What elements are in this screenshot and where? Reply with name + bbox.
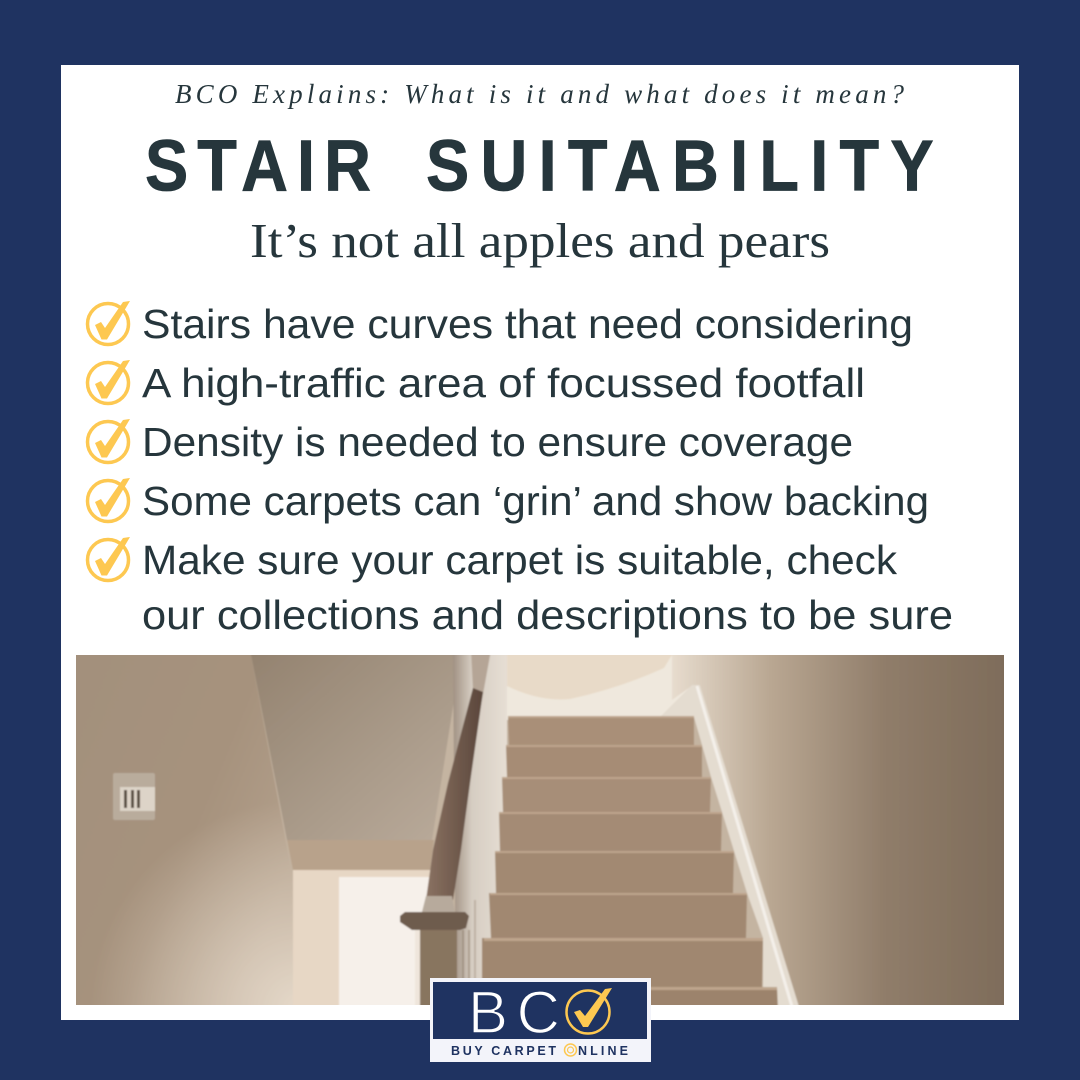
white skirting (660, 685, 800, 1010)
subtitle: It’s not all apples and pears (250, 213, 830, 268)
icon: check (88, 301, 130, 344)
item 5: Make sure your carpet is suitable, check (142, 537, 898, 583)
icon: check (88, 478, 130, 522)
step nosing highlights (480, 716, 777, 990)
icon: check (88, 360, 130, 404)
icon: check (88, 419, 130, 462)
landing white curve (507, 656, 686, 720)
item 2: A high-traffic area of focussed footfall (142, 360, 865, 406)
newel cap (400, 912, 469, 930)
logo tagline: BUY CARPET (451, 1044, 556, 1058)
logo letters: BC (468, 979, 560, 1046)
newel cone (422, 896, 455, 912)
checklist (88, 301, 953, 638)
title: STAIR (145, 125, 371, 206)
carpet steps (477, 716, 778, 1010)
sloped ceiling (250, 650, 462, 840)
light switch (113, 773, 155, 820)
icon: check (88, 537, 130, 580)
balusters (453, 650, 507, 1010)
logo carpet roll O (564, 1044, 576, 1056)
left wall (76, 655, 293, 1005)
handrail top (470, 655, 490, 694)
newel post (419, 928, 458, 1005)
title: SUITABILITY (426, 125, 934, 206)
item 5: our collections and descriptions to be sure (142, 592, 953, 638)
item 3: Density is needed to ensure coverage (142, 419, 853, 465)
item 4: Some carpets can ‘grin’ and show backing (142, 478, 929, 524)
window (293, 870, 433, 1010)
kicker text: BCO Explains: What is it and what does it mean? (175, 79, 904, 109)
item 5 (88, 537, 953, 638)
white panel (61, 65, 1019, 1020)
left wall glow (114, 828, 294, 1005)
logo: BCO Buy Carpet Online (430, 978, 651, 1062)
logo tagline end: NLINE (578, 1044, 628, 1058)
title (145, 125, 934, 206)
right wall (672, 650, 1010, 1010)
ceiling band (287, 840, 434, 870)
item 1: Stairs have curves that need considering (142, 301, 913, 347)
logo check icon (566, 988, 612, 1034)
photo: carpeted staircase (70, 650, 1010, 1010)
landing (506, 655, 672, 700)
handrail (426, 688, 483, 900)
